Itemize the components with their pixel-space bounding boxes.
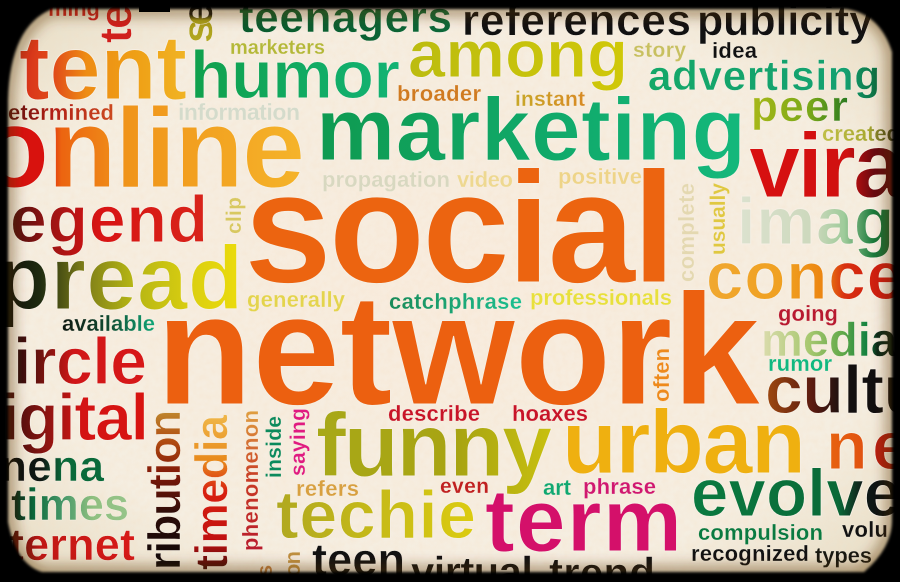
word: story: story <box>633 39 686 62</box>
word: generally: generally <box>247 287 346 312</box>
word: circle: ircle <box>13 324 147 398</box>
word: evolve: evolve <box>691 456 900 531</box>
word: instant: instant <box>515 88 585 111</box>
word: complete: complete <box>674 183 699 282</box>
word: legend: egend <box>10 182 208 256</box>
word: hoaxes: hoaxes <box>512 401 588 426</box>
black top sliver <box>139 5 170 12</box>
word: recognized: recognized <box>691 541 809 566</box>
word: propagation: propagation <box>322 167 450 192</box>
word: catchphrase: catchphrase <box>389 289 522 314</box>
word: on: on <box>280 551 305 577</box>
word: professionals: professionals <box>530 285 672 310</box>
word: techie: techie <box>276 477 476 553</box>
word: spread: pread <box>0 229 243 329</box>
word: created: created <box>822 121 900 146</box>
word: phenomena: nena <box>0 442 105 491</box>
word: media: media <box>761 313 898 366</box>
word: network: network <box>156 262 761 438</box>
word: describe: describe <box>388 401 480 426</box>
word: marketing: marketing <box>316 79 746 179</box>
word: going: going <box>778 301 838 326</box>
word: tent: tent <box>19 17 187 119</box>
word: phrase: phrase <box>583 474 656 499</box>
word: social: social <box>244 140 676 316</box>
word: phenomenon: phenomenon <box>238 410 263 551</box>
word: saying: saying <box>287 408 310 476</box>
word: refers: refers <box>296 476 359 501</box>
word: term: term <box>485 470 682 570</box>
word: se: se <box>174 2 222 43</box>
word: even: even <box>440 475 489 498</box>
word: volume: volu <box>842 517 888 542</box>
word: concept: conce <box>706 239 900 314</box>
word: among: among <box>408 17 628 92</box>
word: digital: igital <box>1 380 149 454</box>
word: humor: humor <box>190 37 400 113</box>
word: s fragment: s <box>252 565 277 577</box>
word: marketers: marketers <box>230 37 325 59</box>
word: clip: clip <box>223 197 246 234</box>
word: multimedia: timedia <box>186 414 237 570</box>
word: available: available <box>62 311 155 336</box>
word: peer: peer <box>751 82 848 131</box>
word: times: times <box>11 479 129 530</box>
word: broader: broader <box>397 81 481 106</box>
word: determined: etermined <box>8 100 114 125</box>
word: funny: funny <box>316 396 552 496</box>
word: usually: usually <box>707 183 730 255</box>
word: often: often <box>649 348 674 402</box>
word: advertising: advertising <box>648 52 880 99</box>
word: distribution: ribution <box>139 410 190 570</box>
word: information: information <box>178 99 300 125</box>
word: urban: urban <box>562 393 806 493</box>
word: te: te <box>90 4 141 43</box>
word: inside: inside <box>263 416 286 478</box>
word: compulsion: compulsion <box>698 520 823 545</box>
word: art: art <box>543 475 572 500</box>
word: positive: positive <box>558 164 642 189</box>
word: rumor: rumor <box>768 351 832 376</box>
word: internet: ternet <box>9 519 135 570</box>
word: video: video <box>457 167 513 192</box>
word: types: types <box>815 543 872 568</box>
word: idea: idea <box>712 38 758 63</box>
